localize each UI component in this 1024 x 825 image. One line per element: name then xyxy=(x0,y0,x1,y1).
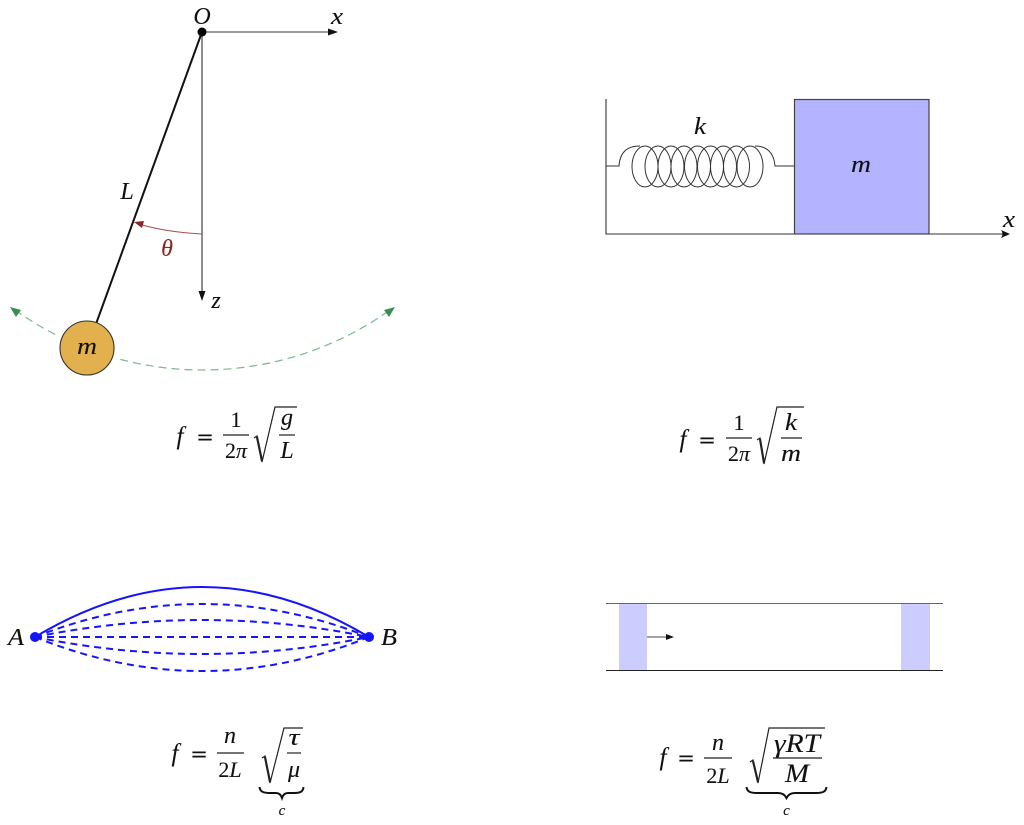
labels: L xyxy=(119,179,134,205)
tube walls xyxy=(606,604,943,670)
labels xyxy=(6,625,397,651)
formula: gas frequency: = xyxy=(677,746,695,770)
panel: gas tube xyxy=(606,603,943,671)
angle arc xyxy=(134,221,202,234)
formula: spring frequency: 2π xyxy=(728,441,751,466)
labels: z xyxy=(210,288,221,314)
formula: spring frequency: f xyxy=(680,426,690,453)
bob halo xyxy=(57,318,117,378)
formula: spring frequency: = xyxy=(698,428,716,452)
wall and floor xyxy=(606,99,1010,238)
formula: gas frequency: n xyxy=(712,730,724,756)
formula: gas frequency: 2L xyxy=(706,763,730,788)
formula: string frequency: τ xyxy=(288,725,301,751)
formula: pendulum frequency: 2π xyxy=(225,438,248,463)
wave arrow xyxy=(647,634,674,640)
formula: pendulum frequency: g xyxy=(281,405,293,431)
panel: vibrating string xyxy=(6,587,397,671)
rod xyxy=(92,32,202,335)
formula: spring frequency: m xyxy=(781,441,801,467)
labels: θ xyxy=(161,236,173,262)
panel: pendulum xyxy=(10,4,395,378)
endpoints xyxy=(30,632,374,642)
block xyxy=(794,100,929,234)
formula: spring frequency: 1 xyxy=(734,410,744,435)
spring xyxy=(606,146,794,187)
bob xyxy=(60,321,114,375)
labels: x xyxy=(1002,207,1015,233)
labels: k xyxy=(694,114,706,140)
formula: pendulum frequency: 1 xyxy=(230,407,242,432)
formula: string frequency xyxy=(172,723,304,819)
labels xyxy=(694,114,1015,233)
formula: string frequency: μ xyxy=(287,757,300,783)
formula: gas frequency: M xyxy=(784,759,810,788)
formula: string frequency: n xyxy=(224,723,236,749)
formula: gas frequency: c xyxy=(783,803,790,819)
formula: pendulum frequency: = xyxy=(196,425,214,449)
formula: string frequency: 2L xyxy=(218,757,242,782)
labels: B xyxy=(381,625,397,651)
pivot O xyxy=(198,28,206,36)
gas slabs xyxy=(619,603,930,671)
fundamental mode xyxy=(35,587,369,637)
formula: string frequency: c xyxy=(279,803,286,819)
bob: m xyxy=(77,334,97,360)
formula: pendulum frequency xyxy=(177,405,297,464)
z axis xyxy=(198,32,206,301)
formula: spring frequency xyxy=(680,407,804,467)
x axis xyxy=(202,28,338,36)
labels xyxy=(119,4,343,314)
formula: spring frequency: k xyxy=(785,410,797,436)
dashed harmonics xyxy=(35,604,369,671)
formula: string frequency: = xyxy=(190,742,208,766)
swing arc xyxy=(10,307,395,370)
labels: x xyxy=(330,4,343,30)
formula: pendulum frequency: f xyxy=(177,423,187,450)
formula: gas frequency xyxy=(660,728,826,819)
labels: A xyxy=(6,625,24,651)
formula: string frequency: f xyxy=(172,740,182,767)
labels: O xyxy=(193,4,211,30)
formula: pendulum frequency: L xyxy=(279,438,294,464)
labels: m xyxy=(851,152,871,178)
panel: mass spring xyxy=(606,99,1015,238)
formula: gas frequency: γRT xyxy=(774,729,822,758)
formula: gas frequency: f xyxy=(660,744,670,771)
